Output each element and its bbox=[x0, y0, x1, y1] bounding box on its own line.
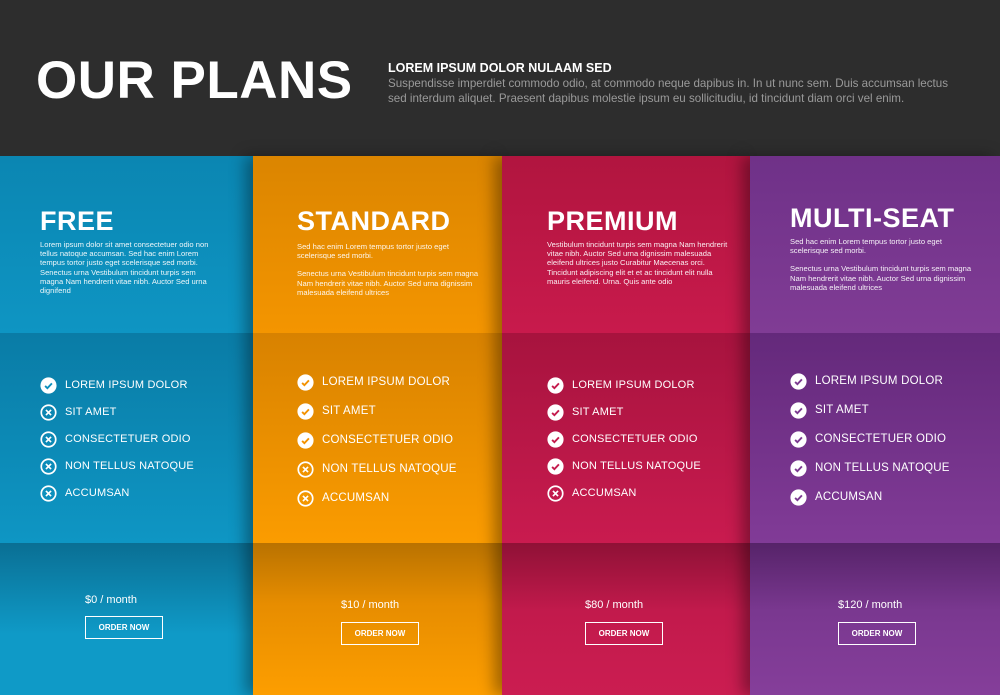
button: standard bbox=[341, 622, 419, 645]
list: free features: ACCUMSAN bbox=[65, 487, 130, 499]
button: multi-seat bbox=[838, 622, 916, 645]
button: standard: ORDER NOW bbox=[355, 629, 405, 638]
header bbox=[0, 0, 1000, 156]
intro text: Suspendisse imperdiet commodo odio, at commodo neque dapibus in. In ut nunc sem. Duis accumsan lectus sed interdum aliquet. Praesent dapibus molestie ipsum eu sollicitudiu, id tincidunt diam orci vel enim. bbox=[388, 77, 948, 105]
price: premium: $80 / month bbox=[585, 599, 643, 611]
list: multi-seat features: CONSECTETUER ODIO bbox=[815, 433, 946, 445]
text: multi-seat description: Sed hac enim Lorem tempus tortor justo eget scelerisque sed morbi. bbox=[790, 237, 942, 255]
list: free features bbox=[40, 377, 194, 502]
list: standard features: NON TELLUS NATOQUE bbox=[322, 463, 457, 475]
heading: free: FREE bbox=[40, 206, 114, 236]
list: standard features: LOREM IPSUM DOLOR bbox=[322, 376, 450, 388]
list: premium features: NON TELLUS NATOQUE bbox=[572, 460, 701, 472]
text: standard description bbox=[297, 242, 478, 297]
list: premium features: SIT AMET bbox=[572, 406, 624, 418]
heading: premium: PREMIUM bbox=[547, 206, 678, 236]
text: standard description: Sed hac enim Lorem tempus tortor justo eget scelerisque sed morbi. bbox=[297, 242, 449, 260]
heading: standard: STANDARD bbox=[297, 206, 450, 236]
list: multi-seat features: ACCUMSAN bbox=[815, 491, 882, 503]
list: premium features bbox=[547, 377, 701, 502]
list: premium features: ACCUMSAN bbox=[572, 487, 637, 499]
list: premium features: CONSECTETUER ODIO bbox=[572, 433, 698, 445]
button: premium bbox=[585, 622, 663, 645]
list: standard features bbox=[297, 374, 457, 507]
button: premium: ORDER NOW bbox=[599, 629, 649, 638]
list: standard features: CONSECTETUER ODIO bbox=[322, 434, 453, 446]
text: standard description: Senectus urna Vestibulum tincidunt turpis sem magna Nam hendrerit vitae nibh. Auctor Sed urna dignissim malesuada eleifend ultrices bbox=[297, 269, 478, 297]
heading: multi-seat: MULTI-SEAT bbox=[790, 203, 954, 233]
list: free features: NON TELLUS NATOQUE bbox=[65, 460, 194, 472]
price: multi-seat: $120 / month bbox=[838, 599, 902, 611]
button: multi-seat: ORDER NOW bbox=[852, 629, 902, 638]
list: free features: SIT AMET bbox=[65, 406, 117, 418]
list: multi-seat features bbox=[790, 373, 950, 506]
panel: standard bbox=[253, 156, 502, 695]
panel: premium bbox=[502, 156, 750, 695]
price: free: $0 / month bbox=[85, 594, 137, 606]
list: standard features: ACCUMSAN bbox=[322, 492, 389, 504]
list: standard features: SIT AMET bbox=[322, 405, 376, 417]
text: free description: Lorem ipsum dolor sit amet consectetuer odio non tellus natoque accumsan. Sed hac enim Lorem tempus tortor justo eget scelerisque sed morbi. Senectus urna Vestibulum tincidunt turpis sem magna Nam hendrerit vitae nibh. Auctor Sed urna dignifend bbox=[40, 240, 208, 295]
button: free bbox=[85, 616, 163, 639]
list: multi-seat features: NON TELLUS NATOQUE bbox=[815, 462, 950, 474]
list: multi-seat features: SIT AMET bbox=[815, 404, 869, 416]
list: premium features: LOREM IPSUM DOLOR bbox=[572, 379, 695, 391]
button: free: ORDER NOW bbox=[99, 623, 149, 632]
text: multi-seat description: Senectus urna Vestibulum tincidunt turpis sem magna Nam hendrerit vitae nibh. Auctor Sed urna dignissim malesuada eleifend ultrices bbox=[790, 264, 971, 292]
text: premium description: Vestibulum tincidunt turpis sem magna Nam hendrerit vitae nibh. Auctor Sed urna dignissim malesuada eleifend ultrices justo Curabitur Maecenas orci. Tincidunt adipiscing elit et et ac tincidunt elit nulla mauris eleifend. Urna. Quis ante odio bbox=[547, 240, 727, 286]
panel: free bbox=[0, 156, 253, 695]
list: free features: CONSECTETUER ODIO bbox=[65, 433, 191, 445]
panel: multi-seat bbox=[750, 156, 1000, 695]
text: multi-seat description bbox=[790, 237, 972, 292]
list: multi-seat features: LOREM IPSUM DOLOR bbox=[815, 375, 943, 387]
price: standard: $10 / month bbox=[341, 599, 399, 611]
intro heading: LOREM IPSUM DOLOR NULAAM SED bbox=[388, 61, 612, 75]
list: free features: LOREM IPSUM DOLOR bbox=[65, 379, 188, 391]
title: OUR PLANS bbox=[36, 51, 353, 110]
